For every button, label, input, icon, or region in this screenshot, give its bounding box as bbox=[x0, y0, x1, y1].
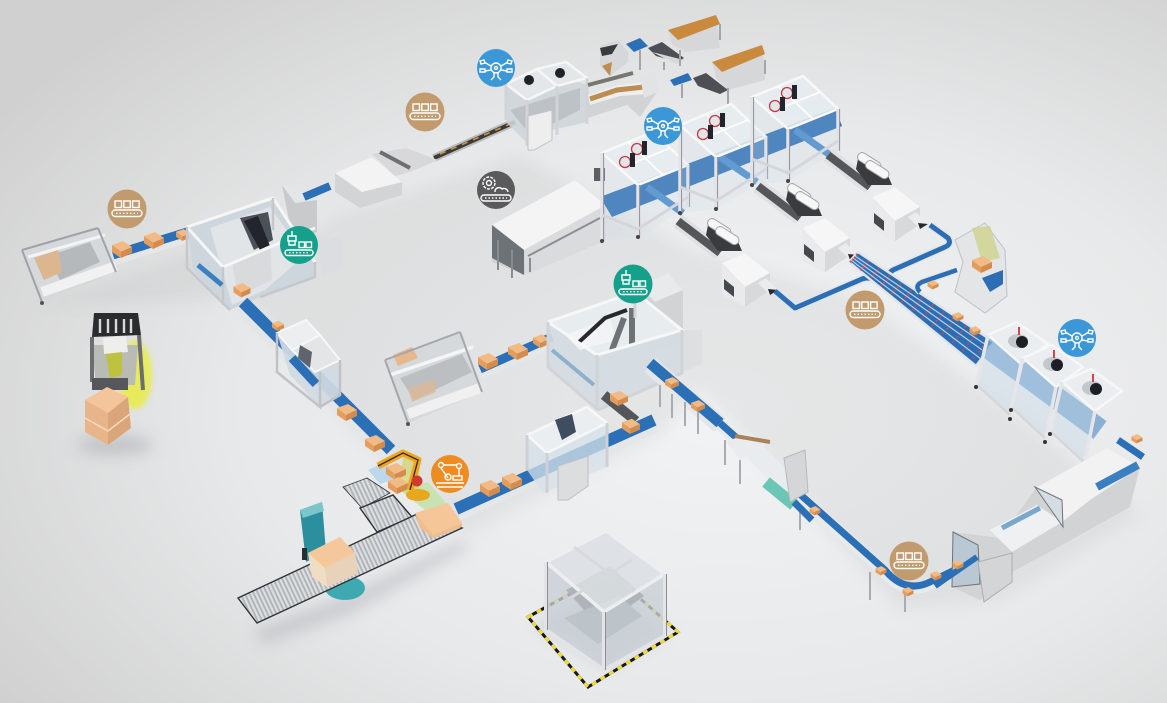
conveyor: product lines bundle bbox=[775, 225, 994, 366]
machine: lower cell bbox=[527, 407, 607, 500]
icon: blue delta network middle bbox=[644, 107, 682, 145]
machine: inline frame on diagonal bbox=[272, 320, 340, 407]
icon: dark gray process gears bbox=[477, 171, 515, 209]
conveyor: top line between flow wrappers bbox=[304, 122, 515, 197]
conveyor: delta cell belts bbox=[600, 108, 842, 217]
conveyor: middle infeed bbox=[478, 334, 552, 372]
flow wrappers row bbox=[678, 151, 928, 307]
icon: blue delta network right bbox=[1058, 319, 1096, 357]
machine: left case erector bbox=[22, 228, 116, 305]
icon: brown conveyor top bbox=[406, 92, 444, 132]
conveyor: long outfeed bbox=[650, 363, 975, 612]
machine: oven bbox=[492, 168, 606, 278]
roller conveyors bbox=[238, 478, 462, 623]
machine: forklift with pallet bbox=[85, 313, 152, 445]
icon: blue delta network top bbox=[477, 49, 515, 87]
machine: twin frames top bbox=[506, 62, 587, 150]
conveyor: main diagonal bbox=[240, 302, 391, 452]
icon: teal pick and place left bbox=[280, 226, 318, 264]
machine: right side cartoner bbox=[935, 434, 1143, 602]
conveyor: lower infeed to palletiser bbox=[456, 391, 654, 512]
icon: orange robot palletising bbox=[431, 455, 469, 493]
machine: top-right robot cell bbox=[955, 223, 1007, 313]
stretch wrapper load bbox=[308, 537, 358, 587]
delta robot cells upper row bbox=[600, 76, 840, 243]
icon: brown conveyor bottom bbox=[890, 542, 928, 580]
pallet load on roller bbox=[415, 503, 462, 538]
conveyor: left infeed bbox=[112, 229, 190, 258]
soft floor shadows bbox=[40, 155, 1140, 668]
machine: palletising robot bbox=[368, 452, 452, 514]
machine: central robot cell bbox=[548, 273, 702, 421]
machine: top wrapper bbox=[335, 148, 438, 208]
machine: case packing cell bbox=[187, 183, 343, 310]
robot cage with hazard floor marking bbox=[528, 531, 678, 687]
delta robot cells right row bbox=[974, 321, 1122, 468]
machine: middle case erector bbox=[385, 332, 482, 426]
icon: teal pick and place centre bbox=[614, 264, 652, 304]
machine: curved conveyor and hoppers bbox=[588, 15, 765, 118]
machine: checkweigher bbox=[726, 432, 812, 520]
machine: wrapper base turntable bbox=[300, 502, 365, 600]
icon: brown conveyor left bbox=[108, 190, 146, 228]
icon: brown conveyor right bbox=[846, 290, 884, 330]
